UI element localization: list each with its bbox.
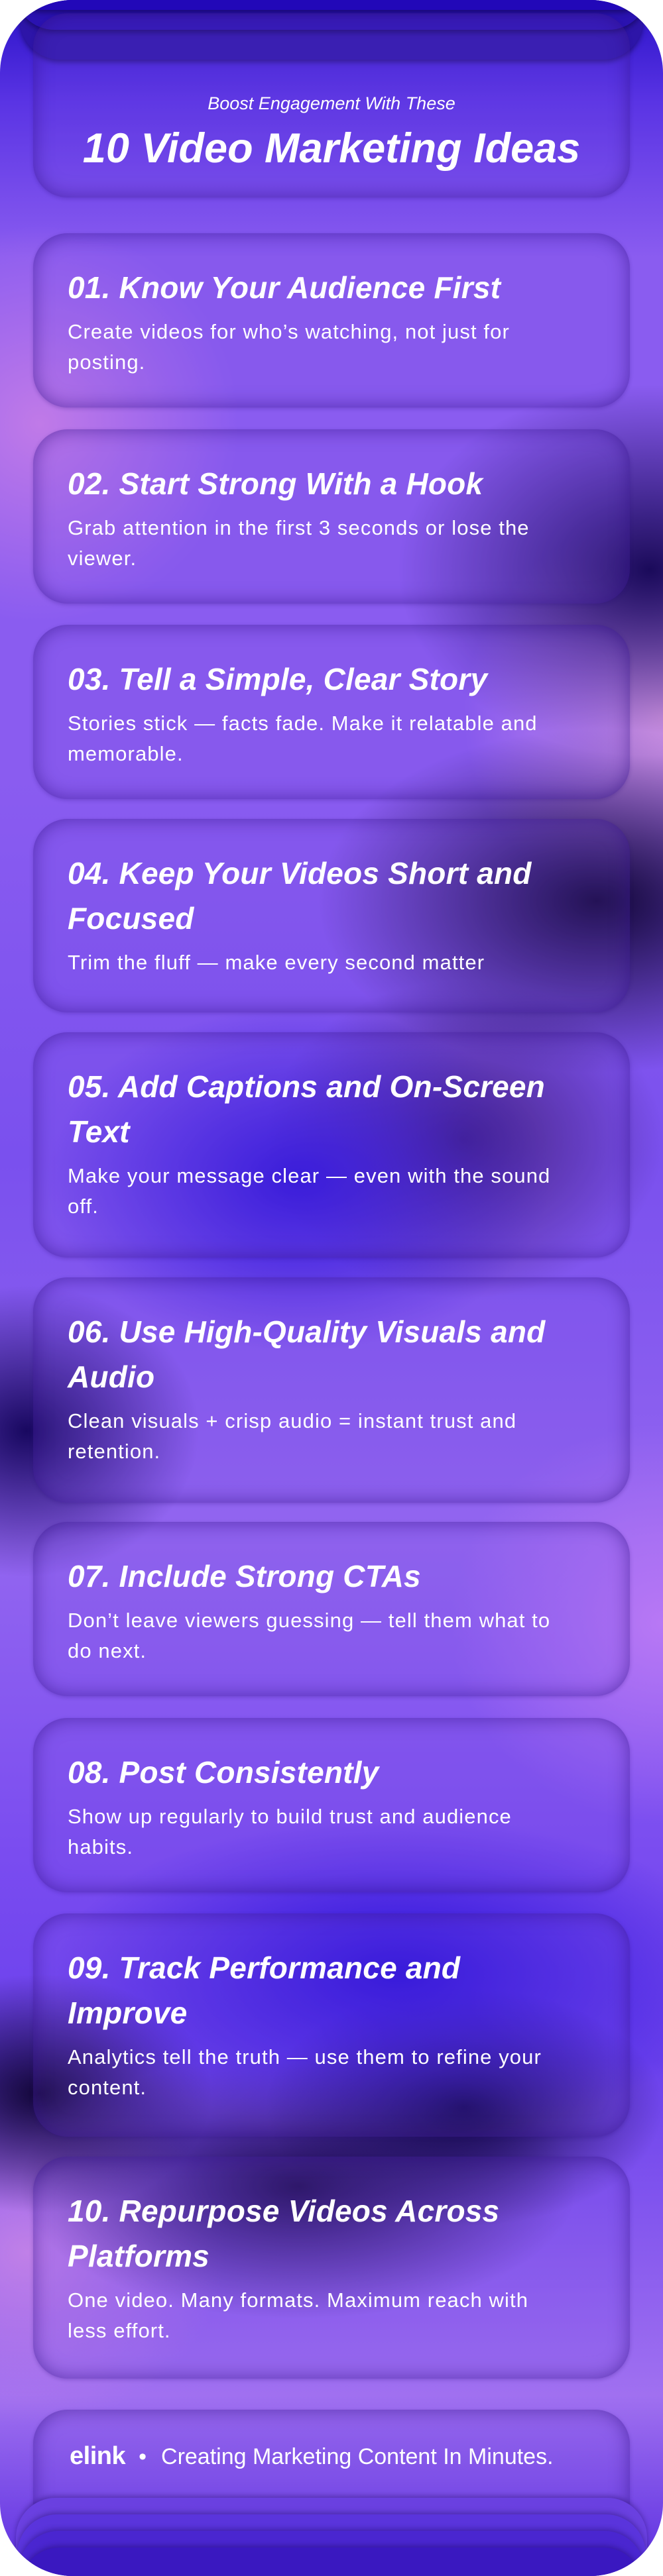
subtitle: Boost Engagement With These [208,93,455,113]
card 02: viewer. [68,547,137,570]
card 10: Platforms [68,2239,210,2273]
card 05: off. [68,1195,99,1218]
card 06: Audio [68,1360,154,1394]
card 10 [33,2157,630,2379]
card 10: less effort. [68,2319,171,2342]
card 07 [33,1522,630,1696]
card 09: Analytics tell the truth — use them to refine your [68,2045,542,2068]
card 10: One video. Many formats. Maximum reach with [68,2288,528,2312]
footer card [33,2410,630,2555]
card 05: 05. Add Captions and On-Screen [68,1069,545,1104]
card 07: do next. [68,1639,147,1662]
card 03: 03. Tell a Simple, Clear Story [68,662,487,696]
card 08: 08. Post Consistently [68,1755,379,1790]
card 06: retention. [68,1440,160,1463]
card 04 [33,819,630,1012]
card 05: Make your message clear — even with the sound [68,1164,550,1187]
footer text with logo: elink • Creating Marketing Content In Minutes. [70,2442,554,2470]
card 05: Text [68,1114,130,1149]
card 02 [33,429,630,604]
card 03 [33,625,630,799]
card 06: Clean visuals + crisp audio = instant trust and [68,1409,516,1432]
card 09: content. [68,2076,147,2099]
card 03: memorable. [68,742,184,765]
card 07: 07. Include Strong CTAs [68,1559,421,1593]
card 08: habits. [68,1835,133,1858]
card 05 [33,1032,630,1258]
card 03: Stories stick — facts fade. Make it relatable and [68,712,538,735]
card 10: 10. Repurpose Videos Across [68,2194,499,2228]
card 08: Show up regularly to build trust and audience [68,1805,512,1828]
card 04: Trim the fluff — make every second matter [68,951,485,974]
card 01: posting. [68,350,145,374]
top stacked layers [17,0,646,65]
card 06 [33,1277,630,1503]
card 01 [33,233,630,407]
card 09 [33,1913,630,2137]
card 06: 06. Use High-Quality Visuals and [68,1315,545,1349]
card 02: Grab attention in the first 3 seconds or lose the [68,516,530,539]
bottom stacked layers [13,2493,650,2576]
card 02: 02. Start Strong With a Hook [68,466,483,501]
card 04: Focused [68,901,194,936]
card 08 [33,1718,630,1892]
title: 10 Video Marketing Ideas [83,125,580,172]
card 07: Don’t leave viewers guessing — tell them what to [68,1609,550,1632]
card 01: 01. Know Your Audience First [68,270,501,305]
card 01: Create videos for who’s watching, not just for [68,320,510,343]
header card [33,13,630,197]
card 09: Improve [68,1996,187,2030]
card 09: 09. Track Performance and [68,1951,460,1985]
card 04: 04. Keep Your Videos Short and [68,856,532,890]
